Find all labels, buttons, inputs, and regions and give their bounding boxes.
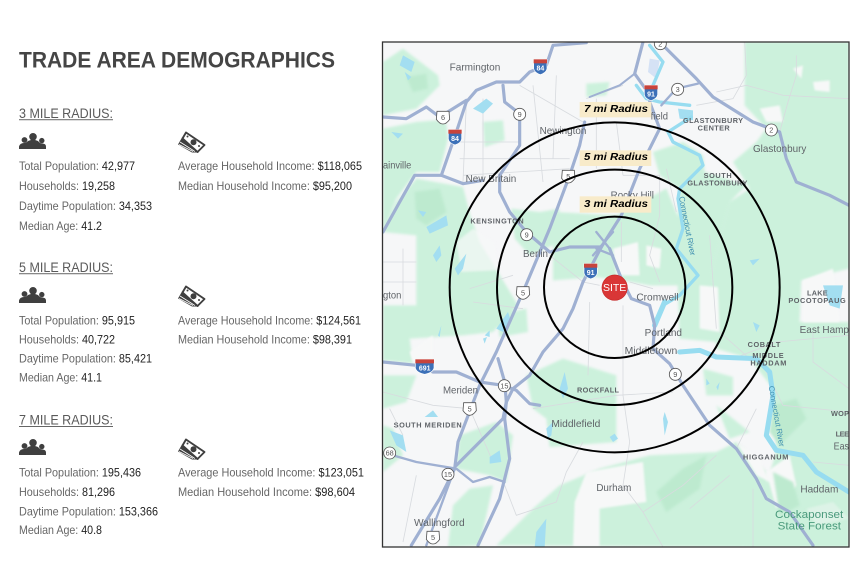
highway shields: 5 [431, 533, 435, 542]
place labels: Newington [540, 126, 587, 137]
place labels: New Britain [466, 174, 517, 185]
icon: money [178, 132, 204, 152]
map border [382, 42, 849, 547]
highway shields: 9 [518, 110, 522, 119]
place labels: Berlin [523, 249, 548, 260]
highway shields: 9 [525, 230, 529, 239]
highway shields: 3 [676, 85, 680, 94]
population stats [19, 466, 158, 537]
icon: money [178, 440, 204, 460]
population stats: Total Population: 195,436 [19, 466, 141, 480]
place labels: GLASTONBURY [683, 116, 743, 125]
population stats: Median Age: 41.2 [19, 219, 102, 233]
place labels: State Forest [778, 520, 842, 532]
place labels: Cockaponset [775, 509, 844, 521]
panel: 5 mile radius [19, 259, 361, 384]
highway shields: 5 [566, 172, 570, 181]
place labels: LEE [836, 430, 849, 439]
icon: people [19, 133, 46, 149]
label: 5 mi radius [580, 150, 651, 166]
highway shields: 691 [419, 365, 431, 372]
icon: people [19, 439, 46, 455]
label: 7 mi radius [580, 102, 651, 117]
place labels: GLASTONBURY [687, 179, 747, 188]
place labels: HIGGANUM [743, 452, 788, 461]
highway shields: 5 [521, 288, 525, 297]
population stats: Total Population: 95,915 [19, 314, 135, 328]
label: 3 mi radius [580, 196, 651, 213]
highway shields [384, 38, 777, 544]
place labels: East Hamp [800, 325, 849, 336]
place labels: Eas [834, 441, 849, 452]
label: 5 mi radius: 5 mi Radius [584, 152, 649, 163]
place labels: COBALT [748, 340, 781, 349]
white clearings [410, 65, 849, 547]
place labels: Wallingford [414, 518, 465, 529]
income stats: Median Household Income: $98,391 [178, 332, 352, 346]
highway shields: 2 [658, 39, 662, 48]
population stats: Households: 81,296 [19, 485, 115, 499]
place labels: Rocky Hill [611, 191, 654, 202]
population stats: Total Population: 42,977 [19, 159, 135, 173]
population stats: Daytime Population: 34,353 [19, 199, 152, 213]
map base [383, 42, 849, 547]
highway shields: 15 [500, 381, 508, 390]
place labels: SOUTH [704, 171, 732, 180]
heading: 3 mile radius: 3 MILE RADIUS: [19, 105, 113, 121]
place labels: WOP [831, 409, 849, 418]
income stats [178, 159, 362, 193]
highway shields: 15 [444, 470, 452, 479]
income stats: Average Household Income: $123,051 [178, 466, 364, 480]
place labels: MIDDLE [752, 351, 784, 360]
highway shields: 68 [386, 449, 394, 458]
place labels: HADDAM [750, 359, 786, 368]
population stats [19, 159, 152, 233]
place labels: Middlefield [551, 419, 601, 430]
population stats: Median Age: 40.8 [19, 523, 102, 537]
population stats: Households: 19,258 [19, 179, 115, 193]
place labels: Meriden [443, 386, 478, 397]
place labels: gton [383, 291, 402, 302]
panel: 7 mile radius [19, 412, 364, 537]
population stats: Daytime Population: 153,366 [19, 504, 158, 518]
green areas [383, 42, 849, 547]
highway shields: 9 [673, 370, 677, 379]
income stats: Average Household Income: $118,065 [178, 159, 362, 173]
site marker: SITE [603, 283, 627, 294]
icon: people [19, 287, 46, 303]
place labels: Durham [596, 483, 631, 494]
population stats: Households: 40,722 [19, 332, 115, 346]
income stats [178, 314, 361, 346]
income stats: Average Household Income: $124,561 [178, 314, 361, 328]
place labels [383, 63, 849, 532]
place labels: field [651, 111, 668, 122]
place labels: Cromwell [636, 293, 679, 304]
highways [383, 42, 849, 545]
place labels: Haddam [800, 485, 838, 496]
map panel [383, 38, 849, 547]
place labels: SOUTH MERIDEN [394, 421, 462, 430]
income stats: Median Household Income: $95,200 [178, 179, 352, 193]
highway shields: 5 [468, 404, 472, 413]
population stats: Daytime Population: 85,421 [19, 352, 152, 366]
radius circles [450, 122, 780, 452]
connecticut river [636, 45, 849, 492]
income stats: Median Household Income: $98,604 [178, 485, 355, 499]
panel: 3 mile radius [19, 105, 362, 233]
heading: 5 mile radius: 5 MILE RADIUS: [19, 259, 113, 275]
place labels: KENSINGTON [470, 217, 524, 226]
place labels: Connecticut River [767, 385, 786, 448]
highway shields: 91 [647, 92, 655, 99]
place labels: ROCKFALL [577, 386, 620, 395]
place labels: ainville [383, 161, 412, 172]
highway shields: 84 [536, 66, 544, 73]
place labels: Glastonbury [753, 144, 807, 155]
highway shields: 91 [587, 270, 595, 277]
title: TRADE AREA DEMOGRAPHICS [19, 47, 335, 72]
place labels: Middletown [625, 346, 678, 357]
place labels: Portland [645, 328, 682, 339]
site marker [602, 275, 627, 300]
place labels: Connecticut River [677, 196, 697, 257]
population stats [19, 314, 152, 384]
place labels: LAKE [807, 288, 828, 297]
water bodies [390, 55, 843, 547]
label: 3 mi radius: 3 mi Radius [584, 199, 649, 210]
heading: 7 mile radius: 7 MILE RADIUS: [19, 412, 113, 428]
place labels: POCOTOPAUG [788, 296, 846, 305]
minor roads [383, 42, 849, 547]
label: 7 mi radius: 7 mi Radius [584, 104, 649, 115]
highway shields: 2 [769, 126, 773, 135]
population stats: Median Age: 41.1 [19, 370, 102, 384]
income stats [178, 466, 364, 499]
place labels: CENTER [698, 123, 730, 132]
icon: money [178, 286, 204, 306]
darker forest patches [406, 74, 806, 515]
highway shields: 84 [451, 136, 459, 143]
place labels: Farmington [450, 63, 501, 74]
highway shields: 6 [441, 113, 445, 122]
